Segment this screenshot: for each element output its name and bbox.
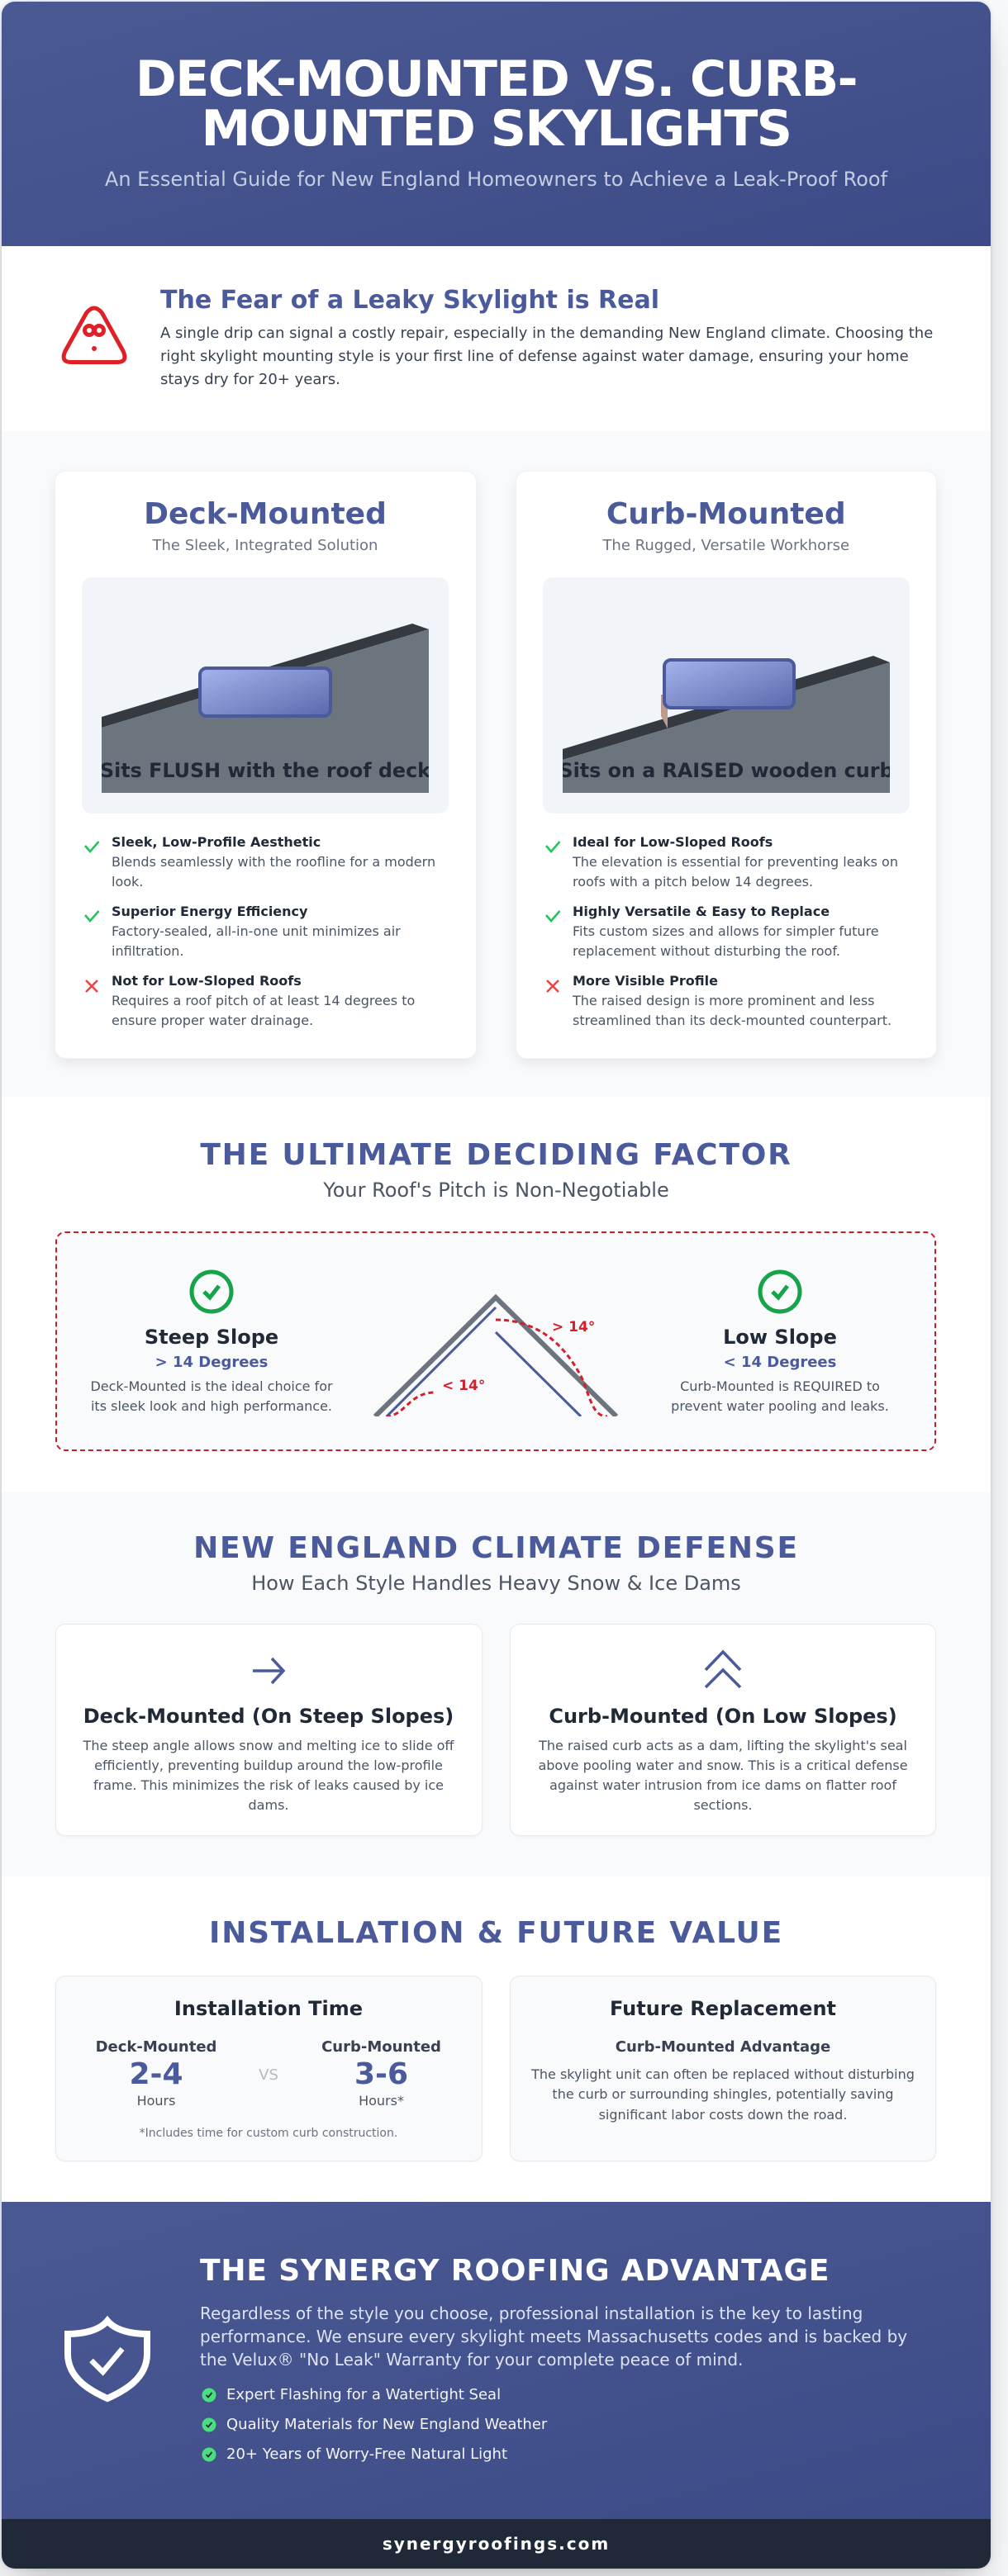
con: low slope <box>85 973 415 1028</box>
footer url: synergyroofings.com <box>383 2534 610 2554</box>
low slope degrees: < 14 Degrees <box>724 1354 836 1371</box>
section heading: NEW ENGLAND CLIMATE DEFENSE <box>193 1531 799 1565</box>
con: low slope: Not for Low-Sloped Roofs <box>112 973 302 989</box>
card title: Curb-Mounted <box>606 497 846 531</box>
pro: low slopes: Ideal for Low-Sloped Roofs <box>573 834 773 850</box>
check item 1: Expert Flashing for a Watertight Seal <box>226 2386 501 2403</box>
title <box>136 50 857 158</box>
pro: sleek: look. <box>112 874 143 890</box>
card title: Deck-Mounted <box>144 497 387 531</box>
card text: frame. This minimizes the risk of leaks caused by ice <box>93 1777 444 1793</box>
diagram: curb-mounted skylight: Sits on a RAISED wooden curb <box>563 759 890 782</box>
low slope text: Curb-Mounted is REQUIRED to <box>680 1378 880 1394</box>
card text <box>83 1738 454 1813</box>
panel: deciding factor <box>2 1097 991 1492</box>
pro: efficiency: Factory-sealed, all-in-one unit minimizes air <box>112 923 401 939</box>
icon: green check circle <box>758 1270 801 1313</box>
stat: deck-mounted hours: 2-4 <box>129 2057 183 2091</box>
icon: shield <box>64 2316 150 2402</box>
pro: sleek <box>84 834 435 890</box>
stat: deck-mounted hours <box>96 2038 216 2109</box>
body text: performance. We ensure every skylight meets Massachusetts codes and is backed by <box>200 2327 907 2346</box>
card text: sections. <box>693 1797 753 1813</box>
intro text <box>160 325 933 388</box>
footer <box>2 2519 991 2569</box>
card text <box>531 2066 915 2123</box>
card subheading: Curb-Mounted Advantage <box>616 2038 830 2056</box>
card: deck-mounted climate <box>55 1624 483 1836</box>
intro text: A single drip can signal a costly repair, especially in the demanding New England climate. Choosing the <box>160 325 933 342</box>
card heading: Future Replacement <box>610 1997 836 2020</box>
card: installation time <box>55 1976 483 2161</box>
card text: efficiently, preventing buildup around the low-profile <box>94 1758 443 1773</box>
heading: THE SYNERGY ROOFING ADVANTAGE <box>200 2254 830 2288</box>
body text: the Velux® "No Leak" Warranty for your complete peace of mind. <box>200 2350 743 2370</box>
stat: curb-mounted hours <box>321 2038 441 2109</box>
diagram: roof pitch: > 14° <box>552 1319 595 1335</box>
pro: low slopes <box>545 834 898 890</box>
icon: warning triangle <box>61 306 127 364</box>
card heading: Curb-Mounted (On Low Slopes) <box>549 1705 897 1728</box>
pro: efficiency: infiltration. <box>112 943 183 959</box>
intro text: right skylight mounting style is your first line of defense against water damage, ensuring your home <box>160 348 909 365</box>
header banner <box>2 2 991 246</box>
low slope title: Low Slope <box>723 1326 837 1349</box>
intro heading: The Fear of a Leaky Skylight is Real <box>160 286 659 315</box>
section heading: INSTALLATION & FUTURE VALUE <box>209 1916 783 1950</box>
section subheading: Your Roof's Pitch is Non-Negotiable <box>323 1179 669 1202</box>
section heading: THE ULTIMATE DECIDING FACTOR <box>200 1138 792 1172</box>
pro: low slopes: The elevation is essential for preventing leaks on <box>573 854 898 870</box>
card text: above pooling water and snow. This is a critical defense <box>538 1758 908 1773</box>
icon: green check circle <box>190 1270 233 1313</box>
pro: sleek: Sleek, Low-Profile Aesthetic <box>112 834 321 850</box>
stat: curb-mounted hours: Curb-Mounted <box>321 2038 441 2056</box>
diagram: deck-mounted skylight: Sits FLUSH with the roof deck <box>102 759 429 782</box>
column: low slope <box>671 1270 889 1414</box>
stat: curb-mounted hours: 3-6 <box>354 2057 408 2091</box>
con: low slope: ensure proper water drainage. <box>112 1013 313 1028</box>
column: steep slope <box>90 1270 333 1414</box>
steep slope text <box>90 1378 333 1414</box>
pro: versatile: Highly Versatile & Easy to Replace <box>573 904 830 919</box>
pro: versatile: Fits custom sizes and allows for simpler future <box>573 923 879 939</box>
card text: dams. <box>249 1797 288 1813</box>
pro: sleek: Blends seamlessly with the roofline for a modern <box>112 854 435 870</box>
panel: intro fear of leak <box>2 246 991 431</box>
card text: against water intrusion from ice dams on flatter roof <box>549 1777 896 1793</box>
diagram: curb-mounted skylight <box>543 577 910 814</box>
body text: Regardless of the style you choose, professional installation is the key to lasting <box>200 2303 863 2323</box>
panel: deck-mounted card <box>55 472 476 1058</box>
low slope text <box>671 1378 889 1414</box>
card heading: Deck-Mounted (On Steep Slopes) <box>83 1705 454 1728</box>
pro: versatile <box>545 904 879 959</box>
card text: the curb or surrounding shingles, potentially saving <box>552 2086 894 2102</box>
card heading: Installation Time <box>174 1997 363 2020</box>
diagram: roof pitch <box>373 1293 618 1416</box>
panel: comparison <box>2 431 991 1097</box>
card: future replacement <box>510 1976 936 2161</box>
card text: The steep angle allows snow and melting ice to slide off <box>83 1738 454 1753</box>
checklist <box>202 2386 547 2463</box>
icon: double chevron <box>704 1650 742 1688</box>
steep slope degrees: > 14 Degrees <box>155 1354 268 1371</box>
card text: The skylight unit can often be replaced without disturbing <box>531 2066 915 2082</box>
body text <box>200 2303 907 2370</box>
check item 2: Quality Materials for New England Weather <box>226 2416 547 2433</box>
vs label: VS <box>259 2066 278 2084</box>
card: curb-mounted climate <box>510 1624 936 1836</box>
title: DECK-MOUNTED VS. CURB- <box>136 50 857 108</box>
card text: The raised curb acts as a dam, lifting the skylight's seal <box>539 1738 907 1753</box>
low slope text: prevent water pooling and leaks. <box>671 1398 889 1414</box>
pro: low slopes: roofs with a pitch below 14 degrees. <box>573 874 813 890</box>
panel: curb-mounted card <box>516 472 936 1058</box>
stat: curb-mounted hours: Hours* <box>359 2093 404 2109</box>
subtitle: An Essential Guide for New England Homeowners to Achieve a Leak-Proof Roof <box>105 168 887 191</box>
steep slope text: Deck-Mounted is the ideal choice for <box>90 1378 333 1394</box>
diagram: deck-mounted skylight <box>82 577 449 814</box>
card text: significant labor costs down the road. <box>599 2107 847 2123</box>
card text <box>538 1738 908 1813</box>
pro: efficiency <box>84 904 401 959</box>
check item 3: 20+ Years of Worry-Free Natural Light <box>226 2446 507 2463</box>
dashed comparison box <box>55 1231 936 1451</box>
section subheading: How Each Style Handles Heavy Snow & Ice Dams <box>251 1572 741 1595</box>
card subtitle: The Sleek, Integrated Solution <box>153 537 378 554</box>
card subtitle: The Rugged, Versatile Workhorse <box>602 537 849 554</box>
icon: arrow <box>253 1657 286 1685</box>
panel: climate defense <box>2 1492 991 1876</box>
con: visible profile <box>546 973 892 1028</box>
stat: deck-mounted hours: Deck-Mounted <box>96 2038 216 2056</box>
stat: deck-mounted hours: Hours <box>137 2093 175 2109</box>
intro text: stays dry for 20+ years. <box>160 371 340 388</box>
steep slope title: Steep Slope <box>145 1326 278 1349</box>
pro: efficiency: Superior Energy Efficiency <box>112 904 307 919</box>
title: MOUNTED SKYLIGHTS <box>201 100 792 158</box>
con: visible profile: The raised design is more prominent and less <box>573 993 874 1008</box>
con: visible profile: streamlined than its deck-mounted counterpart. <box>573 1013 892 1028</box>
diagram: roof pitch: < 14° <box>442 1378 485 1394</box>
pro: versatile: replacement without disturbing the roof. <box>573 943 840 959</box>
footnote: *Includes time for custom curb construction. <box>140 2127 397 2140</box>
con: low slope: Requires a roof pitch of at least 14 degrees to <box>112 993 415 1008</box>
steep slope text: its sleek look and high performance. <box>91 1398 332 1414</box>
panel: installation and future value <box>2 1876 991 2202</box>
con: visible profile: More Visible Profile <box>573 973 718 989</box>
panel: synergy roofing advantage <box>2 2202 991 2519</box>
